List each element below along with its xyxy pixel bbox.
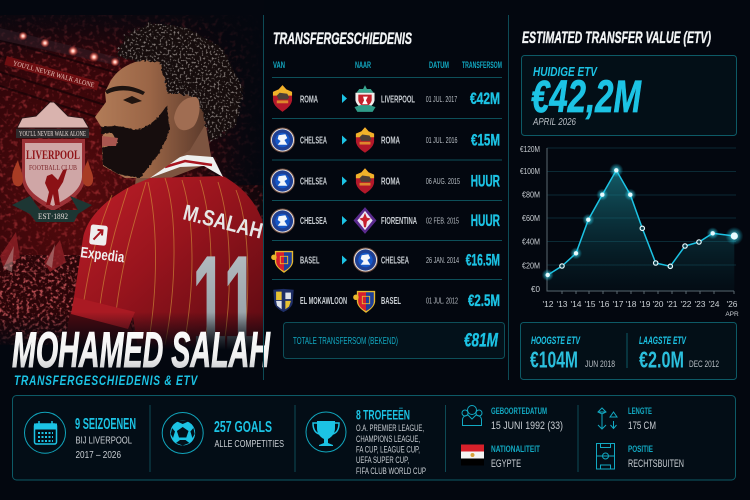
face <box>95 58 205 178</box>
x-axis labels <box>542 299 739 318</box>
icon: Egyptian flag <box>461 444 484 466</box>
y-axis labels: €100M <box>520 166 540 176</box>
panel: estimated transfer value <box>520 29 743 380</box>
banner: You'll Never Walk Alone: YOU'LL NEVER WALK ALONE <box>12 59 95 89</box>
row: Basel to Chelsea: 26 JAN. 2014 <box>426 256 459 265</box>
column dividers <box>264 15 508 380</box>
row: Basel to Chelsea: €16.5M <box>466 252 500 270</box>
table header <box>273 60 502 70</box>
fact: position: POSITIE <box>628 444 653 454</box>
y-axis labels: €40M <box>522 236 540 246</box>
row: Chelsea to Fiorentina: CHELSEA <box>300 216 327 227</box>
sponsor text: Expedia <box>80 244 126 266</box>
y-axis labels: €0 <box>531 284 540 294</box>
row: Chelsea to Fiorentina <box>270 207 500 234</box>
hair <box>116 23 243 143</box>
row: Basel to Chelsea: BASEL <box>300 256 320 266</box>
area under line <box>548 170 734 291</box>
fact: height: 175 CM <box>628 420 656 432</box>
row: Chelsea to Roma 2016: CHELSEA <box>300 136 327 146</box>
x-axis labels: '20 <box>652 299 664 309</box>
row: El Mokawloon to Basel: EL MOKAWLOON <box>300 296 347 307</box>
x-axis labels: '15 <box>584 299 596 309</box>
row: El Mokawloon to Basel: BASEL <box>381 296 401 307</box>
x-axis labels: '16 <box>598 299 610 309</box>
fact: nationality: EGYPTE <box>491 458 521 470</box>
stat: trophies: UEFA SUPER CUP, <box>356 455 409 465</box>
panel: stadium background <box>0 0 264 345</box>
fact: height: LENGTE <box>628 406 652 416</box>
icon: person <box>462 406 482 426</box>
crest: Liverpool FC: EST·1892 <box>38 212 68 221</box>
total transfer sum box: TOTALE TRANSFERSOM (BEKEND) <box>293 336 398 347</box>
fact: height <box>628 406 656 432</box>
highest and lowest ETV box: JUN 2018 <box>585 359 615 369</box>
y-axis labels: €80M <box>522 190 540 200</box>
fact: position <box>628 444 684 470</box>
row: Chelsea to Fiorentina: 02 FEB. 2015 <box>426 216 459 226</box>
neck <box>135 120 212 185</box>
crowd <box>0 232 100 345</box>
player: Mohamed Salah: 11 <box>192 227 258 379</box>
row: Roma to Liverpool: €42M <box>470 90 500 108</box>
arm under sleeve <box>64 312 140 350</box>
highest and lowest ETV box: €104M <box>530 346 578 372</box>
row: Basel to Chelsea: CHELSEA <box>381 256 409 266</box>
current ETV box: €42,2M <box>531 71 642 122</box>
icon: height <box>598 408 617 429</box>
lips <box>102 136 118 146</box>
sponsor logo <box>89 224 108 246</box>
jersey <box>72 176 264 350</box>
stat: goals: 257 GOALS <box>214 419 272 436</box>
table header: TRANSFERSOM <box>462 60 502 70</box>
row: Chelsea to Fiorentina: HUUR <box>471 212 500 230</box>
stat: trophies: FIFA CLUB WORLD CUP <box>356 466 426 476</box>
x-axis labels: '17 <box>612 299 624 309</box>
x-axis labels: '18 <box>625 299 637 309</box>
crest: Liverpool FC <box>12 102 93 222</box>
x-axis labels: '23 <box>694 299 706 309</box>
ETV line <box>548 170 734 275</box>
crest: Liverpool FC: YOU'LL NEVER WALK ALONE <box>19 130 86 138</box>
x-axis labels: '26 <box>726 299 738 309</box>
highest and lowest ETV box: DEC 2012 <box>689 359 719 369</box>
stat: goals <box>214 419 284 450</box>
line chart <box>520 144 743 318</box>
stat: seasons: 2017 – 2026 <box>76 449 121 461</box>
y-axis labels <box>520 144 540 294</box>
y-axis labels: €60M <box>522 213 540 223</box>
panel: transfer history <box>270 30 504 358</box>
eye and brow <box>105 86 145 95</box>
current ETV box: HUIDIGE ETV <box>533 64 598 79</box>
table header: DATUM <box>429 60 449 70</box>
x-axis labels: APR <box>725 311 739 318</box>
crest: Liverpool FC: FOOTBALL CLUB <box>29 163 77 172</box>
M.SALAH shirt name: M.SALAH <box>181 200 265 243</box>
stat: trophies: 8 TROFEEËN <box>356 406 410 422</box>
panel: player facts <box>12 396 736 480</box>
title: player name: MOHAMED SALAH <box>12 322 271 378</box>
fact: date of birth <box>491 406 563 432</box>
row: Roma to Liverpool: 01 JUL. 2017 <box>426 95 458 104</box>
row: Chelsea to Roma 2016: €15M <box>471 132 500 150</box>
row: El Mokawloon to Basel: 01 JUL. 2012 <box>426 296 458 306</box>
stat: trophies <box>356 406 426 476</box>
row: Roma to Liverpool: ROMA <box>300 94 318 106</box>
sleeve cuff <box>71 297 135 329</box>
heading: TRANSFERGESCHIEDENIS <box>273 30 412 48</box>
y-axis labels: €20M <box>522 260 540 270</box>
crest: Liverpool FC: LIVERPOOL <box>26 147 80 162</box>
icon: pitch <box>596 444 614 469</box>
collar <box>150 155 223 178</box>
current ETV box <box>522 56 736 136</box>
x-axis labels: '14 <box>570 299 582 309</box>
row: Roma to Liverpool: LIVERPOOL <box>381 94 415 106</box>
table header: VAN <box>273 60 285 70</box>
stat: trophies: CHAMPIONS LEAGUE, <box>356 434 420 444</box>
x-axis labels: '19 <box>639 299 651 309</box>
row: Chelsea to Roma 2015: ROMA <box>381 176 400 188</box>
row: Chelsea to Roma 2015 <box>270 168 500 194</box>
x-axis labels: '12 <box>542 299 554 309</box>
stat: goals: ALLE COMPETITIES <box>214 438 284 450</box>
highest and lowest ETV box: €2.0M <box>639 346 684 372</box>
row: Chelsea to Roma 2015: CHELSEA <box>300 176 327 188</box>
row: Basel to Chelsea <box>271 248 500 273</box>
fact: date of birth: 15 JUNI 1992 (33) <box>491 420 563 432</box>
fact: nationality <box>491 444 540 470</box>
fact: position: RECHTSBUITEN <box>628 458 684 470</box>
icon: calendar <box>24 412 66 453</box>
stat: seasons <box>75 416 136 461</box>
table header: NAAR <box>355 60 371 70</box>
row: Roma to Liverpool <box>273 85 500 112</box>
ear <box>174 97 200 130</box>
row: Chelsea to Fiorentina: FIORENTINA <box>381 216 417 227</box>
highest and lowest ETV box: LAAGSTE ETV <box>639 335 687 347</box>
player: Mohamed Salah <box>64 23 265 379</box>
highest and lowest ETV box: HOOGSTE ETV <box>531 335 581 347</box>
jersey pinstripes <box>84 178 248 345</box>
x-axis labels: '21 <box>666 299 678 309</box>
icon: trophy <box>306 412 346 452</box>
row: Chelsea to Roma 2015: HUUR <box>471 172 500 190</box>
stat: trophies: O.A. PREMIER LEAGUE, <box>356 423 424 433</box>
row: Chelsea to Roma 2016: ROMA <box>381 136 400 146</box>
current ETV box: APRIL 2026 <box>532 117 576 128</box>
x-axis labels: '13 <box>556 299 568 309</box>
total transfer sum box: €81M <box>464 331 499 352</box>
row: El Mokawloon to Basel: €2.5M <box>468 292 500 310</box>
fact: date of birth: GEBOORTEDATUM <box>491 406 547 416</box>
stat: trophies: FA CUP, LEAGUE CUP, <box>356 444 420 454</box>
row: El Mokawloon to Basel <box>273 289 500 313</box>
x-axis labels: '24 <box>708 299 720 309</box>
row: Chelsea to Roma 2016 <box>270 127 500 153</box>
subtitle: TRANSFERGESCHIEDENIS & ETV <box>14 373 198 388</box>
y-axis labels: €120M <box>520 144 540 154</box>
data points <box>542 163 743 281</box>
beard <box>101 105 170 178</box>
row: Chelsea to Roma 2015: 06 AUG. 2015 <box>426 177 460 186</box>
fade under name <box>0 312 270 350</box>
x-axis labels: '22 <box>680 299 692 309</box>
highest and lowest ETV box <box>520 322 736 380</box>
fact: nationality: NATIONALITEIT <box>491 444 540 454</box>
stat: seasons: 9 SEIZOENEN <box>75 416 136 433</box>
row: Chelsea to Roma 2016: 01 JUL. 2016 <box>426 136 458 145</box>
stat: seasons: BIJ LIVERPOOL <box>76 434 132 446</box>
total transfer sum box <box>284 322 504 358</box>
icon: football <box>162 412 203 454</box>
